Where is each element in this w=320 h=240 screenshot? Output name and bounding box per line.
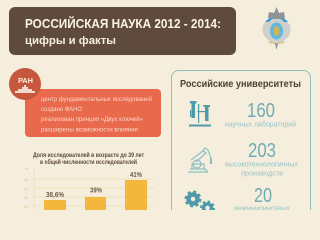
stat: 203: высокотехнологичных (225, 162, 299, 168)
icon: RAN badge: РАН (18, 76, 33, 85)
bar values: 39% (90, 186, 102, 194)
title line 2: цифры и факты (25, 35, 116, 47)
bar values: 41% (130, 170, 142, 179)
title line 1: РОССИЙСКАЯ НАУКА 2012 - 2014: (25, 16, 221, 31)
panel text: создано ФАНО (41, 106, 82, 113)
axis labels: 30 (24, 204, 29, 209)
icon: gears (186, 192, 214, 214)
stat: 20 (234, 185, 291, 212)
icon: RAN badge (9, 68, 41, 100)
chart title (33, 151, 144, 166)
axis labels: 45 (24, 177, 29, 182)
bar values (46, 170, 142, 199)
stat: 160 (225, 100, 296, 128)
stat: 20: 20 (254, 185, 272, 207)
stat: 160: научных лабораторий (225, 120, 296, 128)
stat: 203 (225, 140, 299, 178)
chart title: Доля исследователей в возрасте до 39 лет (33, 151, 144, 159)
panel text (41, 95, 152, 134)
panel text: расширены возможности влияния (41, 126, 138, 134)
icon: lab flasks (189, 101, 211, 126)
axis labels: % (25, 166, 29, 171)
axis labels: 40 (24, 186, 29, 191)
panel text: реализован принцип «Двух ключей» (41, 115, 143, 123)
icon: robot arm (188, 148, 211, 172)
panel: Russian universities (172, 70, 310, 220)
stat: 160: 160 (247, 100, 275, 122)
bar chart (24, 166, 155, 210)
panel: RAN (25, 89, 161, 137)
axis labels (24, 166, 29, 209)
title banner (9, 7, 236, 55)
panel heading: Российские университеты (180, 79, 301, 90)
icon: university crest (262, 7, 290, 50)
panel text: центр фундаментальных исследований (41, 95, 152, 103)
chart title: в общей численности исследователей (40, 158, 137, 166)
stat: 203: производств (241, 170, 283, 178)
axis labels: 35 (24, 195, 29, 200)
stat: 203: 203 (248, 140, 276, 162)
bars (44, 180, 147, 210)
bar values: 38,6% (46, 190, 64, 199)
